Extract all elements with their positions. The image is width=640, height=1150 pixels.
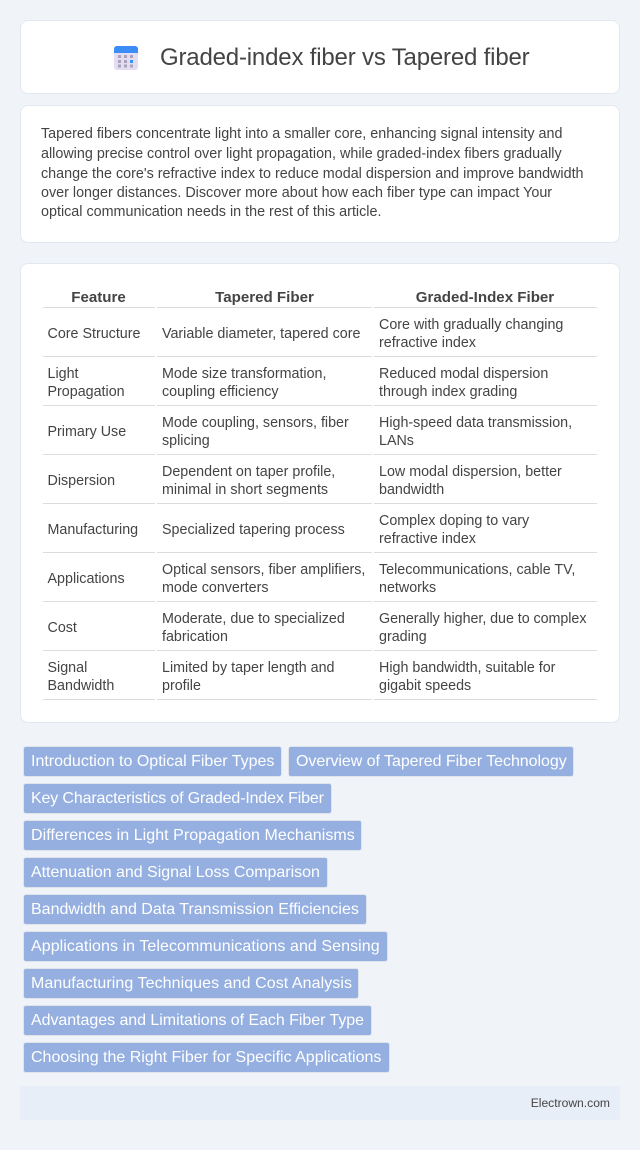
row: primary use: splicing [162, 433, 210, 449]
row: primary use: Mode coupling, sensors, fiber [162, 415, 349, 431]
row: light propagation [48, 366, 548, 400]
topic tag [23, 820, 362, 851]
row: cost: Generally higher, due to complex [379, 611, 586, 627]
topic tag: Choosing the Right Fiber for Specific Applications [31, 1049, 381, 1066]
row: applications: Telecommunications, cable TV, [379, 562, 575, 578]
row: core structure: Core Structure [48, 326, 140, 342]
topic tag: Introduction to Optical Fiber Types [31, 753, 274, 770]
row: cost: grading [379, 629, 427, 645]
footer credit: Electrown.com [531, 1096, 610, 1110]
intro paragraph: Tapered fibers concentrate light into a smaller core, enhancing signal intensity and [41, 126, 562, 142]
topic tag [23, 894, 367, 925]
table header row: Graded-Index Fiber [416, 289, 554, 306]
row: cost [48, 611, 586, 645]
row: applications [48, 562, 575, 596]
row: light propagation: Light [48, 366, 79, 382]
row: primary use: Primary Use [48, 424, 126, 440]
table header row: Tapered Fiber [215, 289, 314, 306]
row: applications: Optical sensors, fiber amplifiers, [162, 562, 365, 578]
row: signal bandwidth: High bandwidth, suitable for [379, 660, 555, 676]
row: cost: Moderate, due to specialized [162, 611, 345, 627]
row: manufacturing: Complex doping to vary [379, 513, 529, 529]
topic tag: Differences in Light Propagation Mechanisms [31, 827, 355, 844]
row: signal bandwidth: Signal [48, 660, 87, 676]
intro paragraph: optical communication needs in the rest of this article. [41, 204, 381, 220]
intro paragraph: over longer distances. Discover more about how each fiber type can impact Your [41, 185, 552, 201]
row: manufacturing [48, 513, 530, 547]
topic tag: Manufacturing Techniques and Cost Analysis [31, 975, 352, 992]
topic tag: Key Characteristics of Graded-Index Fiber [31, 790, 324, 807]
row: primary use: High-speed data transmission, [379, 415, 572, 431]
row: signal bandwidth: profile [162, 678, 201, 694]
intro paragraph: change the core's refractive index to reduce modal dispersion and improve bandwidth [41, 166, 584, 182]
row: dispersion: Dependent on taper profile, [162, 464, 335, 480]
row: manufacturing: refractive index [379, 531, 476, 547]
topic tag [23, 968, 359, 999]
row: primary use [48, 415, 572, 449]
row: dispersion: Low modal dispersion, better [379, 464, 562, 480]
row: applications: Applications [48, 571, 125, 587]
intro text panel [20, 105, 620, 243]
row: core structure: Variable diameter, tapered core [162, 326, 360, 342]
topic tag: Attenuation and Signal Loss Comparison [31, 864, 320, 881]
topic tag [23, 931, 388, 962]
row: primary use: LANs [379, 433, 414, 449]
comparison table panel [20, 263, 620, 723]
icon: calendar grid [114, 46, 138, 70]
row: signal bandwidth: Limited by taper length and [162, 660, 334, 676]
footer bar [20, 1086, 620, 1120]
row: dispersion: minimal in short segments [162, 482, 328, 498]
intro paragraph [41, 126, 584, 220]
row: signal bandwidth: Bandwidth [48, 678, 114, 694]
row: applications: mode converters [162, 580, 268, 596]
row: core structure: Core with gradually changing [379, 317, 563, 333]
table header row: Feature [71, 289, 126, 306]
topic tag: Bandwidth and Data Transmission Efficiencies [31, 901, 359, 918]
table header row [71, 289, 554, 306]
row: signal bandwidth: gigabit speeds [379, 678, 471, 694]
topic tag [23, 1042, 390, 1073]
row: light propagation: Reduced modal dispersion [379, 366, 548, 382]
row: light propagation: through index grading [379, 384, 517, 400]
intro paragraph: allowing precise control over light propagation, while graded-index fibers gradually [41, 146, 562, 162]
row: light propagation: Propagation [48, 384, 125, 400]
row: cost: Cost [48, 620, 77, 636]
topic tag [23, 1005, 372, 1036]
row: dispersion: Dispersion [48, 473, 115, 489]
row: applications: networks [379, 580, 436, 596]
topic tag: Advantages and Limitations of Each Fiber Type [31, 1012, 364, 1029]
row: dispersion: bandwidth [379, 482, 444, 498]
row: dispersion [48, 464, 562, 498]
row: light propagation: coupling efficiency [162, 384, 279, 400]
row: manufacturing: Manufacturing [48, 522, 138, 538]
topic tag [23, 746, 282, 777]
row: light propagation: Mode size transformation, [162, 366, 326, 382]
row: manufacturing: Specialized tapering process [162, 522, 345, 538]
topic tag [23, 783, 332, 814]
topic tag: Applications in Telecommunications and Sensing [31, 938, 380, 955]
title: Graded-index fiber vs Tapered fiber [160, 44, 529, 71]
topic tag [288, 746, 574, 777]
topic tag [23, 857, 328, 888]
topic tag: Overview of Tapered Fiber Technology [296, 753, 567, 770]
row: core structure [48, 317, 563, 351]
row: cost: fabrication [162, 629, 228, 645]
row: signal bandwidth [48, 660, 556, 694]
header card [20, 20, 620, 94]
row: core structure: refractive index [379, 335, 476, 351]
